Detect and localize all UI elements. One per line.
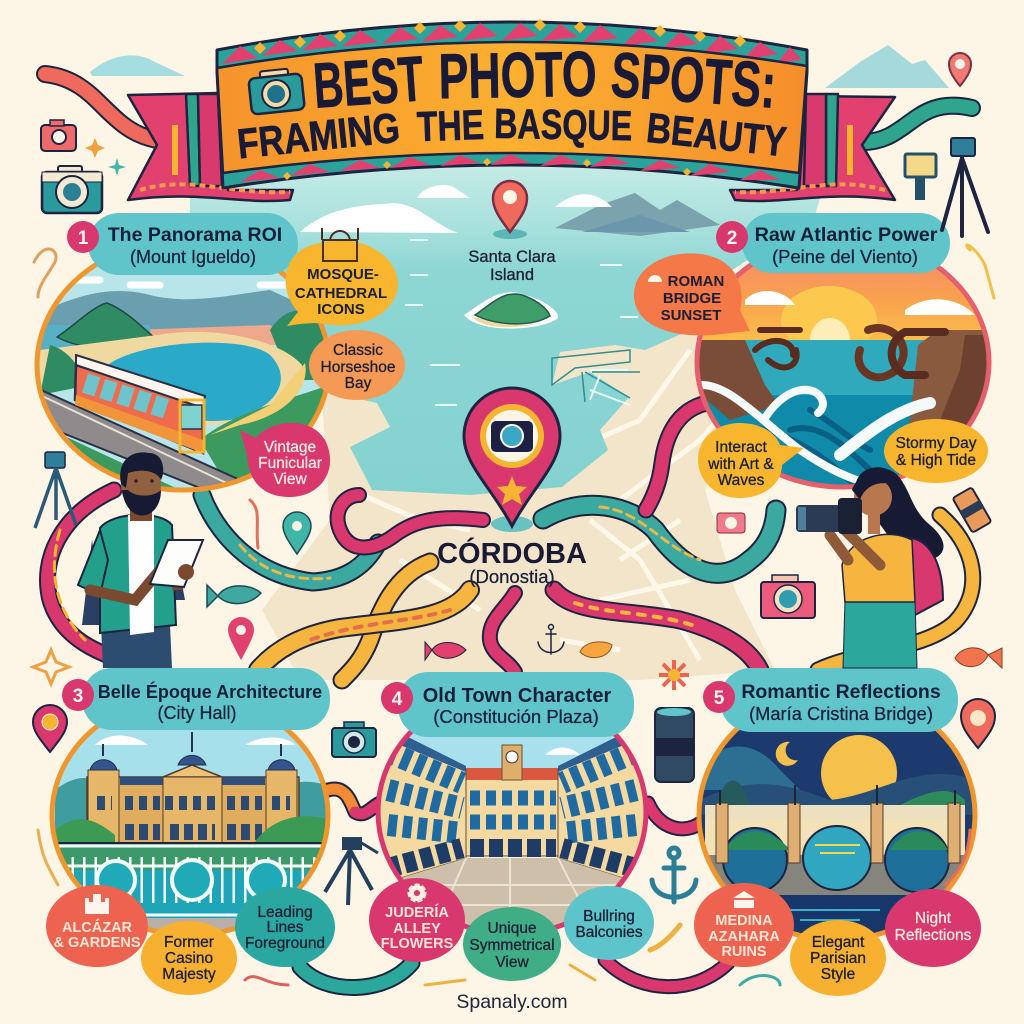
callout: Medina Azahara Ruins: MEDINA: [715, 913, 773, 929]
icon: teal fish: [207, 585, 261, 607]
heading 2: Raw Atlantic Power: [755, 224, 938, 246]
icon: teal pin: [283, 512, 311, 554]
footer credit: Spanaly.com: [456, 991, 568, 1013]
icon: sun pin left: [33, 705, 67, 752]
icon: banner camera: [248, 67, 305, 115]
panel 1: Mount Igueldo scene: [34, 262, 328, 492]
callout: Night Reflections: [885, 889, 981, 967]
heading 3: 3: [73, 686, 83, 707]
icon: sun flower: [659, 660, 689, 690]
title text: BEAUTY: [644, 104, 789, 165]
heading 1: [67, 213, 298, 275]
heading 4: [381, 672, 634, 737]
icon: small camera centre: [717, 513, 745, 533]
ribbon streamers: [45, 74, 972, 142]
callout: Night Reflections: Night: [915, 910, 952, 927]
callout: Bullring Balconies: Balconies: [575, 924, 643, 941]
callout: Juderia Alley Flowers: ALLEY: [393, 921, 441, 937]
callout: Interact with Art & Waves: with Art &: [707, 456, 774, 473]
callout: Elegant Parisian Style: Parisian: [810, 950, 866, 967]
icon: anchor: [652, 848, 696, 902]
callout: Vintage Funicular View: View: [273, 471, 307, 488]
icon: camera light: [905, 154, 936, 200]
heading 2: (Peine del Viento): [772, 246, 918, 267]
heading 3: (City Hall): [158, 703, 236, 723]
heading 4: Old Town Character: [423, 685, 611, 707]
title text: BASQUE: [494, 100, 633, 149]
callout: Unique Symmetrical View: [463, 907, 561, 981]
icon: orange fish centre: [580, 642, 612, 658]
panel 3: City Hall scene: [50, 724, 330, 934]
title text: THE: [416, 101, 485, 150]
panel 5: Maria Cristina Bridge scene: [696, 728, 978, 938]
callout: Roman Bridge Sunset: BRIDGE: [663, 290, 721, 307]
callout: Elegant Parisian Style: [790, 920, 886, 996]
callout: Classic Horseshoe Bay: Horseshoe: [321, 359, 395, 376]
callout: Mosque-Cathedral Icons: ICONS: [317, 301, 365, 318]
icon: top map pin: [493, 181, 527, 239]
icon: pink pin: [228, 617, 254, 660]
heading 4: 4: [392, 689, 403, 710]
heading 2: 2: [727, 228, 737, 249]
icon: orange fish right: [955, 648, 1002, 668]
icon: pin top right: [949, 53, 971, 86]
central location pin: [464, 388, 560, 532]
callout: Medina Azahara Ruins: RUINS: [721, 944, 767, 960]
callout: Bullring Balconies: Bullring: [583, 908, 635, 925]
heading 5: 5: [714, 688, 725, 709]
icon: sparkles: [85, 138, 126, 176]
label: Santa Clara Island: Santa Clara: [468, 248, 556, 266]
callout: Vintage Funicular View: [240, 423, 330, 497]
icon: tripod right: [942, 138, 988, 236]
callout: Classic Horseshoe Bay: [309, 330, 405, 400]
label: Santa Clara Island: Island: [490, 266, 534, 284]
figure: man with notepad: [78, 452, 203, 668]
centre label: Cordoba: CÓRDOBA: [437, 536, 587, 570]
title banner: [217, 19, 807, 188]
icon: camera below ribbon: [332, 722, 376, 757]
heading 5: Romantic Reflections: [741, 681, 941, 703]
icon: tripod lower: [325, 837, 378, 905]
callout: Roman Bridge Sunset: ROMAN: [668, 273, 724, 290]
icon: pink fish centre: [425, 642, 466, 660]
heading 5: (María Cristina Bridge): [749, 703, 933, 724]
heading 1: The Panorama ROI: [108, 224, 282, 246]
callout: Former Casino Majesty: Casino: [165, 950, 213, 967]
callout: Roman Bridge Sunset: SUNSET: [661, 307, 721, 324]
callout: Juderia Alley Flowers: [369, 878, 465, 962]
icon: top-left camera: [42, 166, 102, 213]
callout: Classic Horseshoe Bay: Bay: [345, 375, 372, 392]
figure: photographer woman: [796, 467, 944, 668]
heading 1: (Mount Igueldo): [130, 247, 256, 267]
panel 4: Constitucion Plaza scene: [376, 730, 648, 930]
heading 2: [716, 213, 950, 273]
icon: small pink camera: [41, 120, 76, 151]
callout: Medina Azahara Ruins: [694, 883, 794, 967]
title text: SPOTS:: [609, 38, 778, 122]
clouds and sea mountains: [90, 55, 720, 236]
callout: Stormy Day & High Tide: [884, 419, 988, 483]
heading 1: 1: [78, 228, 89, 249]
callout: Leading Lines Foreground: [235, 887, 335, 967]
callout: Roman Bridge Sunset: [634, 253, 750, 335]
heading 4: (Constitución Plaza): [433, 706, 599, 727]
callout: Medina Azahara Ruins: AZAHARA: [708, 929, 780, 945]
callout: Alcazar & Gardens: [46, 885, 148, 967]
callout: Former Casino Majesty: Former: [164, 934, 214, 951]
icon: right pin: [961, 699, 995, 748]
callout: Leading Lines Foreground: Leading: [257, 904, 313, 921]
callout: Leading Lines Foreground: Lines: [266, 919, 304, 936]
callout: Night Reflections: Reflections: [895, 927, 972, 944]
decorative squiggles: [34, 245, 994, 985]
icon: binocular lens right: [952, 487, 992, 533]
title text: FRAMING: [235, 104, 402, 167]
icon: camera lens: [655, 708, 694, 782]
icon: small anchor centre: [538, 624, 564, 654]
callout: Former Casino Majesty: Majesty: [162, 966, 216, 983]
callout: Former Casino Majesty: [141, 921, 237, 995]
callout: Vintage Funicular View: Vintage: [264, 439, 316, 456]
title text: PHOTO: [438, 38, 597, 112]
ribbons: connecting routes: [48, 403, 973, 988]
title text: BEST: [311, 42, 426, 122]
callout: Bullring Balconies: [564, 886, 654, 960]
callout: Leading Lines Foreground: Foreground: [245, 935, 325, 952]
callout: Unique Symmetrical View: Symmetrical: [469, 937, 555, 954]
panel 2: Peine del Viento scene: [694, 263, 992, 490]
heading 3: Belle Époque Architecture: [98, 681, 322, 702]
callout: Interact with Art & Waves: Waves: [718, 472, 765, 489]
callout: Unique Symmetrical View: Unique: [487, 920, 537, 937]
map: land and streets: [262, 320, 775, 680]
callout: Classic Horseshoe Bay: Classic: [333, 342, 383, 359]
callout: Interact with Art & Waves: Interact: [715, 439, 768, 456]
callout: Juderia Alley Flowers: FLOWERS: [381, 936, 454, 952]
callout: Mosque-Cathedral Icons: MOSQUE-: [307, 266, 379, 283]
icon: pink camera right: [761, 575, 815, 618]
callout: Elegant Parisian Style: Elegant: [812, 934, 865, 951]
callout: Alcazar & Gardens: ALCÁZAR: [62, 919, 133, 936]
callout: Vintage Funicular View: Funicular: [258, 455, 322, 472]
callout: Elegant Parisian Style: Style: [821, 966, 855, 983]
icon: orange star left: [33, 650, 69, 684]
map: sea: [190, 165, 830, 495]
callout: Mosque-Cathedral Icons: CATHEDRAL: [295, 285, 387, 302]
callout: Unique Symmetrical View: View: [495, 954, 529, 971]
callout: Stormy Day & High Tide: Stormy Day: [896, 435, 977, 452]
centre label: Cordoba: [437, 536, 587, 587]
centre label: Cordoba: (Donostia): [469, 566, 555, 587]
icon: tripod left: [35, 452, 76, 528]
callout: Stormy Day & High Tide: & High Tide: [896, 452, 976, 469]
title text: [235, 38, 789, 167]
heading 5: [703, 668, 958, 732]
heading 3: [62, 668, 330, 730]
icon: mountains top right: [825, 45, 949, 88]
banner tails: [128, 93, 895, 201]
callout: Mosque-Cathedral Icons: [286, 228, 398, 326]
island: Santa Clara: [464, 292, 558, 329]
callout: Interact with Art & Waves: [698, 423, 804, 498]
callout: Alcazar & Gardens: & GARDENS: [53, 935, 141, 951]
callout: Juderia Alley Flowers: JUDERÍA: [385, 904, 449, 921]
